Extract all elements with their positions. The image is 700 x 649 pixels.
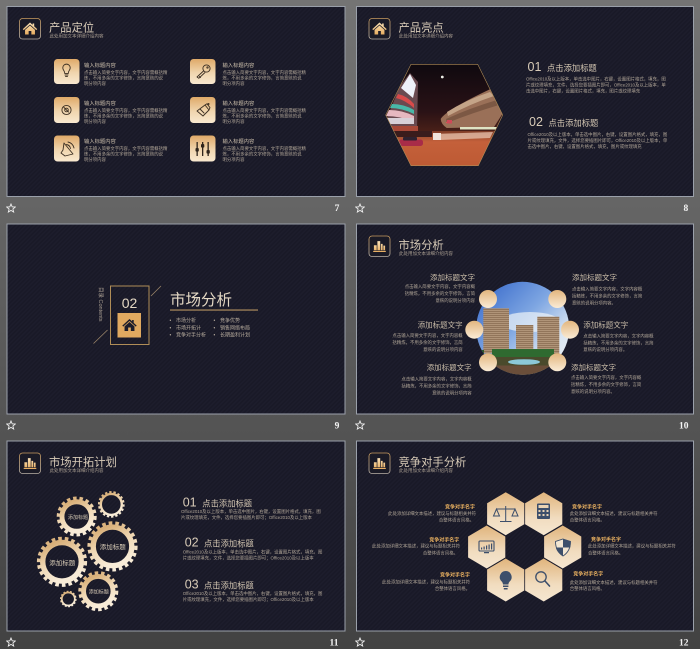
- text block 01: 片或纹理填充，文件，选择您要插图片即可，Office2010及以上版本，单: [526, 82, 666, 88]
- item: megaphone: [54, 136, 168, 163]
- footer: slide 7: 7: [335, 204, 340, 214]
- subheading: 此处用加文本详细介绍内容: [399, 250, 453, 257]
- panel: slide 12 competitor analysis: [356, 441, 694, 631]
- competitor: upper right: 竞争对手名字: [572, 504, 602, 511]
- callout: lower right: 点击输入简要文字内容，文字内容概: [571, 374, 642, 381]
- text block 02: [528, 115, 668, 150]
- item: sliders: 明分项内容: [222, 156, 245, 163]
- section title: 市场分析: [170, 291, 232, 309]
- competitor: lower left: 此处添加详细文本描述，建议与标题相关并符: [382, 578, 471, 586]
- text block 01: [526, 60, 666, 94]
- text block 02: 02: [185, 536, 199, 550]
- competitor: middle left: 此处添加详细文本描述，建议与标题相关并符: [372, 543, 461, 550]
- subheading: 此处用加文本详细介绍内容: [399, 32, 453, 40]
- footer: slide 12: 12: [679, 638, 689, 648]
- gear 2: [99, 492, 124, 517]
- callout: middle left: 括精炼，不用多余的文字修饰，言简: [392, 339, 463, 346]
- subheading: 此处用加文本详细介绍内容: [50, 467, 104, 474]
- gear cluster: [39, 492, 136, 610]
- callout: middle left: [392, 320, 463, 353]
- text block 03: 点击添加标题: [204, 581, 254, 591]
- text block 02: 点击添加标题: [204, 539, 254, 549]
- callout: upper left: 意赅的说明分项内容: [435, 297, 476, 304]
- hexagon: light bulb: [487, 558, 524, 602]
- item: sliders: 炼，不用多余的文字修饰，言简意赅的说: [222, 150, 302, 158]
- text block 01: 01: [183, 496, 197, 510]
- footer: slide 8: 8: [684, 204, 688, 214]
- competitor: upper right: 合整体语言风格。: [570, 516, 605, 524]
- text block 02: Office2010及以上版本，单击选中图片，右键，设置图片格式，填充，图: [183, 548, 323, 556]
- gear 6: [61, 591, 76, 607]
- footer: slide 10: 10: [679, 422, 689, 432]
- text block 02: 击选中图片，右键，设置图片格式，填充，图片或纹理填充: [528, 143, 642, 150]
- item: key: [190, 59, 307, 87]
- subheading: 此处用加文本详细介绍内容: [399, 467, 453, 474]
- callout: middle right: 添加标题文字: [583, 320, 628, 330]
- competitor: middle right: 竞争对手名字: [591, 536, 621, 543]
- footer: slide 10: [356, 421, 689, 432]
- item: key: 炼，不用多余的文字修饰，言简意赅的说: [222, 74, 302, 82]
- text block 02: 片或纹理填充，文件，选择您要插图片即可；Office2010及以上版本: [183, 554, 314, 562]
- item: light bulb: [54, 59, 168, 87]
- item: megaphone: 炼，不用多余的文字修饰，言简意赅的说: [84, 150, 164, 158]
- panel: slide 9 section divider: [7, 224, 345, 414]
- competitor: upper left: [388, 504, 477, 524]
- item: light bulb: 炼，不用多余的文字修饰，言简意赅的说: [84, 74, 164, 82]
- competitor: middle left: 竞争对手名字: [429, 536, 459, 544]
- hexagon: shield: [544, 526, 581, 568]
- callout: upper right: 添加标题文字: [572, 272, 617, 282]
- competitor: lower right: [570, 570, 658, 592]
- section list: 竞争优势: [220, 317, 240, 324]
- callout: lower left: 点击输入简要文字内容，文字内容概: [401, 376, 472, 382]
- item: key: 点击输入简要文字内容，文字内容需概括精: [222, 69, 307, 76]
- callout: lower right: 括精炼，不用多余的文字修饰，言简: [571, 381, 642, 388]
- competitor: upper right: [570, 504, 658, 524]
- gear 4: 添加标题: [49, 558, 76, 567]
- text block 01: [181, 496, 321, 521]
- callout: lower left: 添加标题文字: [427, 362, 472, 372]
- item: light bulb: 输入标题内容: [84, 61, 116, 69]
- panel: slide 7 product positioning: [7, 6, 345, 196]
- item: flashlight: 明分项内容: [222, 118, 245, 125]
- heading: 产品定位: [49, 20, 94, 34]
- callout: lower left: 括精炼，不用多余的文字修饰，言简: [401, 382, 472, 390]
- text block 01: 片或纹理填充，文件，选择您要插图片即可；Office2010及以上版本: [181, 514, 313, 521]
- circle photo: residential towers: [476, 281, 570, 376]
- hexagon: calculator: [525, 492, 562, 535]
- competitor: middle right: 合整体语言风格。: [588, 550, 623, 556]
- text block 01: 点击添加标题: [547, 63, 597, 73]
- competitor: upper right: 此处添加详细文本描述，建议与标题相关并符: [570, 510, 658, 517]
- footer: slide 7: [7, 204, 340, 214]
- callout: middle right: 点击输入简要文字内容，文字内容概: [583, 332, 654, 340]
- callout: lower left: [401, 362, 472, 396]
- subheading: 此处用加文本详细介绍内容: [50, 32, 104, 40]
- heading: 市场开拓计划: [49, 455, 117, 469]
- text block 01: Office2010及以上版本，单击选中图片，右键，设置图片格式，填充，图: [181, 508, 321, 515]
- diagonal accents: [94, 286, 161, 344]
- text block 03: 03: [185, 578, 199, 592]
- gear 3: 添加标题: [100, 542, 126, 551]
- section list: 市场开拓计: [176, 324, 201, 332]
- competitor: middle left: 合整体语言风格。: [423, 550, 458, 556]
- callout: upper right: 意赅的说明分项内容。: [572, 300, 616, 306]
- item: sliders: 输入标题内容: [222, 137, 255, 145]
- heading: 市场分析: [398, 238, 444, 252]
- callout: middle left: 添加标题文字: [418, 320, 463, 330]
- competitor: upper left: 竞争对手名字: [445, 504, 475, 511]
- header icon: home: [20, 18, 40, 39]
- text block 02: [183, 536, 323, 562]
- text block 01: 01: [528, 60, 541, 74]
- callout: upper right: 括精炼，不用多余的文字修饰，言简: [572, 292, 643, 300]
- section list: •: [214, 332, 216, 338]
- item: light bulb: 明分项内容: [84, 80, 107, 87]
- callout: upper left: 点击输入简要文字内容，文字内容概: [405, 283, 476, 290]
- competitor: upper left: 合整体语言风格。: [439, 516, 474, 524]
- item: megaphone: 输入标题内容: [84, 137, 116, 145]
- item: disc: 明分项内容: [84, 118, 107, 125]
- item: flashlight: 点击输入简要文字内容，文字内容需概括精: [222, 107, 307, 114]
- callout: lower right: 意赅的说明分项内容。: [571, 388, 615, 395]
- title rule: [170, 309, 258, 311]
- section list: •: [170, 332, 172, 338]
- header icon: home: [369, 18, 390, 39]
- item: flashlight: [190, 97, 307, 125]
- item: disc: 点击输入简要文字内容，文字内容需概括精: [84, 107, 168, 114]
- panel: slide 10 market analysis: [356, 224, 694, 414]
- item: disc: 炼，不用多余的文字修饰，言简意赅的说: [84, 112, 164, 120]
- section list: 市场分析: [176, 317, 196, 324]
- callout: lower right: 添加标题文字: [571, 362, 616, 372]
- node circles: [465, 290, 579, 371]
- section list: 销售网络布局: [220, 324, 250, 332]
- text block 03: 片或纹理填充，文件，选择您要插图片即可；Office2010及以上版本: [183, 596, 314, 603]
- callout: upper left: [405, 272, 476, 304]
- footer: slide 9: 9: [335, 422, 340, 432]
- item: disc: [54, 97, 168, 125]
- text block 02: Office2010及以上版本，单击选中图片，右键，设置图片格式，填充，图: [528, 131, 668, 138]
- hexagon: magnifier: [525, 558, 562, 602]
- competitor: lower left: [382, 572, 471, 592]
- section list: •: [170, 326, 172, 332]
- callout: upper left: 添加标题文字: [430, 272, 475, 282]
- text block 01: 点击添加标题: [202, 499, 252, 509]
- competitor: lower right: 合整体语言风格。: [570, 585, 605, 592]
- callout: middle right: 括精炼，不用多余的文字修饰，言简: [583, 340, 654, 346]
- competitor: middle left: [372, 536, 461, 556]
- section number box: [110, 286, 149, 344]
- item: sliders: 点击输入简要文字内容，文字内容需概括精: [222, 145, 307, 152]
- vertical label: 目录 Contents: [97, 287, 105, 322]
- header icon: bars: [369, 236, 390, 256]
- footer: slide 12: [356, 638, 689, 648]
- gear 5: 添加标题: [89, 588, 109, 596]
- competitor: upper left: 此处添加详细文本描述，建议与标题相关并符: [388, 510, 477, 517]
- callout: lower left: 意赅的说明分项内容: [432, 390, 472, 396]
- text block 02: 点击添加标题: [548, 118, 598, 128]
- text block 03: [183, 578, 323, 603]
- callout: upper left: 括精炼，不用多余的文字修饰，言简: [405, 290, 476, 297]
- callout: middle right: [583, 320, 654, 353]
- section list: [170, 317, 250, 338]
- footer: slide 11: 11: [330, 638, 339, 648]
- item: megaphone: 明分项内容: [84, 156, 107, 163]
- text block 03: Office2010及以上版本，单击选中图片，右键，设置图片格式，填充，图: [183, 590, 323, 597]
- section list: 长期盈利计划: [220, 332, 250, 338]
- item: key: 明分项内容: [222, 80, 245, 87]
- panel: slide 11 market expansion plan: [7, 441, 345, 631]
- competitor: lower left: 竞争对手名字: [440, 572, 470, 578]
- competitor: lower right: 竞争对手名字: [573, 570, 603, 578]
- callout: middle right: 意赅的说明分项内容。: [583, 346, 627, 353]
- section list: •: [214, 318, 216, 324]
- item: key: 输入标题内容: [222, 61, 255, 69]
- competitor: lower left: 合整体语言风格。: [435, 585, 470, 592]
- header icon: bars: [369, 453, 390, 474]
- competitor: lower right: 此处添加详细文本描述，建议与标题相关并符: [570, 579, 658, 586]
- callout: upper right: 点击输入简要文字内容，文字内容概: [572, 286, 643, 292]
- callout: middle left: 点击输入简要文字内容，文字内容概: [392, 332, 463, 339]
- hexagon: scales: [487, 492, 524, 535]
- competitor: middle right: [588, 536, 676, 556]
- footer: slide 9: [7, 421, 340, 432]
- item: flashlight: 炼，不用多余的文字修饰，言简意赅的说: [222, 112, 302, 120]
- text block 02: 02: [529, 115, 543, 129]
- header icon: bars: [20, 453, 40, 474]
- heading: 产品亮点: [398, 20, 444, 34]
- item: disc: 输入标题内容: [84, 99, 116, 107]
- text block 02: 片或纹理填充，文件，选择您要插图片即可，Office2010及以上版本，单: [528, 137, 668, 144]
- item: flashlight: 输入标题内容: [222, 99, 255, 107]
- item: megaphone: 点击输入简要文字内容，文字内容需概括精: [84, 145, 168, 152]
- section list: •: [170, 318, 172, 324]
- section number box: 02: [122, 295, 137, 311]
- section list: 竞争对手分析: [176, 332, 206, 338]
- section list: •: [214, 326, 216, 332]
- text block 01: Office2010及以上版本，单击选中图片，右键，设置图片格式，填充，图: [526, 76, 666, 82]
- footer: slide 8: [356, 204, 688, 214]
- panel: slide 8 product highlights: [356, 6, 694, 196]
- callout: middle left: 意赅的说明分项内容: [423, 346, 463, 353]
- item: sliders: [190, 136, 307, 163]
- item: light bulb: 点击输入简要文字内容，文字内容需概括精: [84, 69, 168, 76]
- competitor: middle right: 此处添加详细文本描述，建议与标题相关并符: [588, 543, 676, 550]
- heading: 竞争对手分析: [398, 455, 466, 469]
- gear 1: 添加标题: [68, 514, 88, 521]
- text block 01: 击选中图片，右键，设置图片格式，填充，图片或纹理填充: [526, 88, 641, 94]
- callout: upper right: [572, 272, 643, 306]
- footer: slide 11: [7, 638, 339, 648]
- hexagon photo: night city street: [385, 64, 504, 167]
- hexagon: monitor chart: [468, 526, 505, 568]
- callout: lower right: [571, 362, 642, 395]
